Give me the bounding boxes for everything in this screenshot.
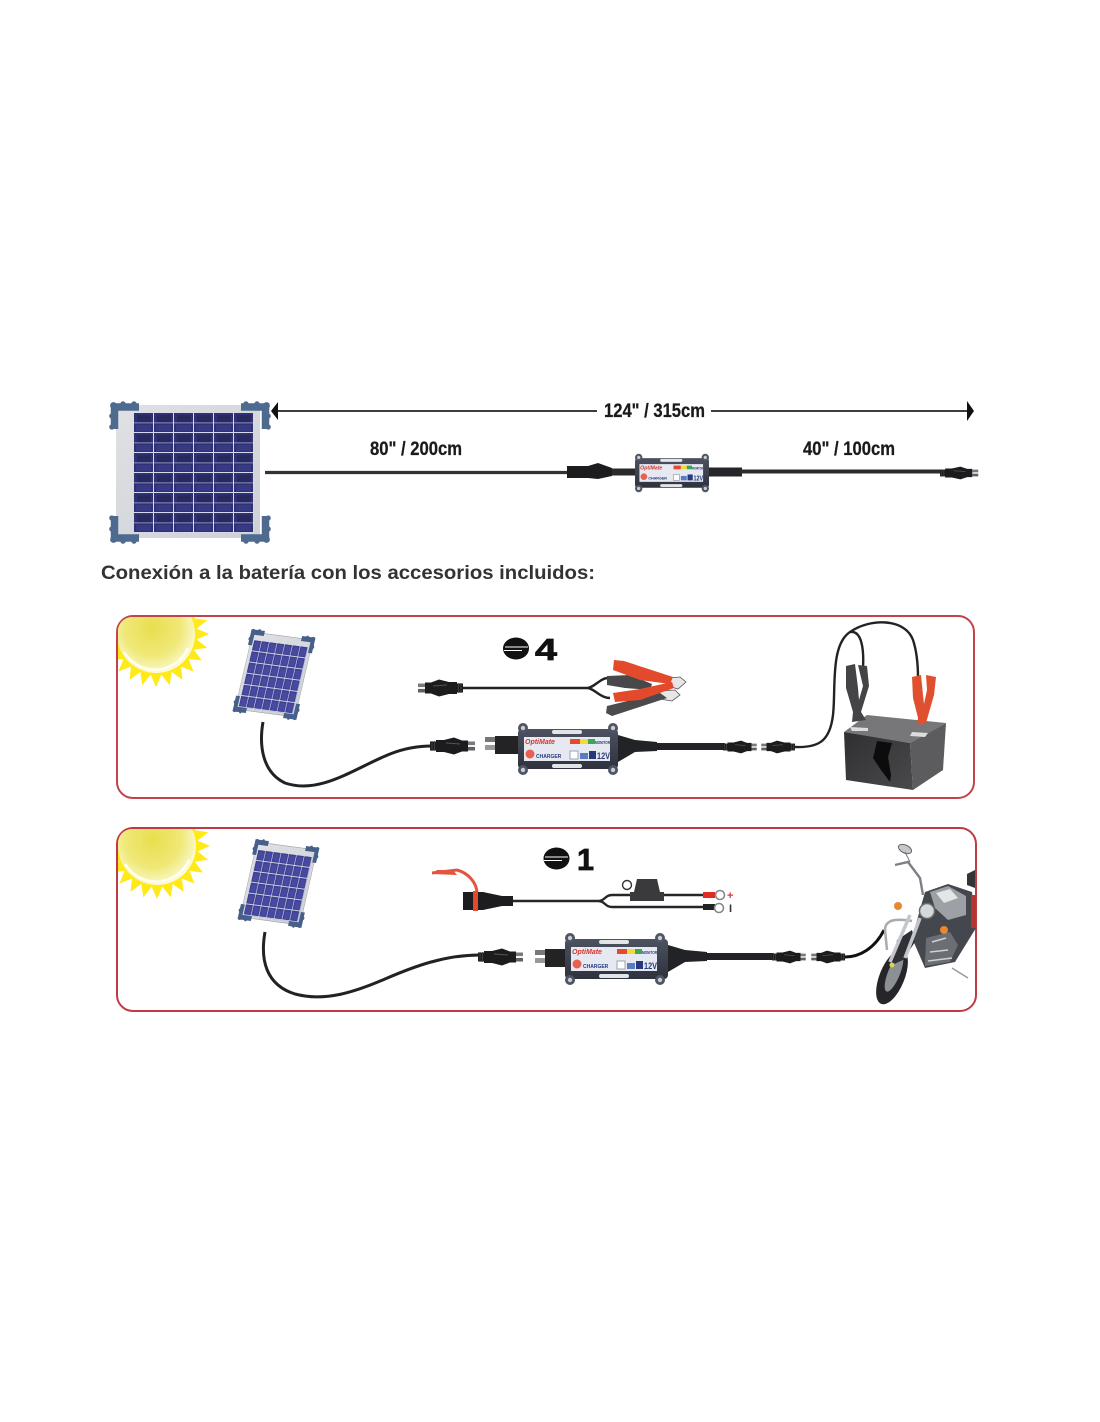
clamp black lower xyxy=(606,693,667,716)
charger unit: CHARGER xyxy=(536,754,562,760)
cable assembly: top overview xyxy=(265,463,978,479)
charger unit: CHARGER xyxy=(583,964,609,970)
connector: panel side xyxy=(430,738,475,754)
solar panel xyxy=(231,628,317,721)
front tire xyxy=(876,954,908,1004)
connector pair: output xyxy=(723,741,795,753)
minus label: I xyxy=(729,903,732,915)
red terminal xyxy=(703,892,715,898)
charger unit: MONITOR xyxy=(595,740,611,745)
panel frame xyxy=(117,616,974,798)
battery xyxy=(844,715,946,790)
red tank edge xyxy=(971,895,976,928)
chrome tank xyxy=(930,886,966,920)
charger: top overview: 12V xyxy=(693,475,703,482)
connector xyxy=(418,680,463,696)
motorcycle xyxy=(870,842,976,1009)
fender xyxy=(892,930,915,965)
charger unit xyxy=(565,933,668,985)
kickstand xyxy=(952,968,968,978)
black battery clamp xyxy=(846,664,869,722)
label: second cable length: 40" / 100cm xyxy=(803,439,895,460)
quantity symbol: 4: 4 xyxy=(535,632,558,667)
cable: panel to connector xyxy=(262,722,432,786)
cable: panel to connector xyxy=(263,932,480,997)
quantity symbol: 4 xyxy=(503,632,558,667)
icon: sun xyxy=(118,617,209,687)
charger plug connector xyxy=(485,736,518,754)
fork lamp marker xyxy=(890,962,894,968)
clamp black upper xyxy=(607,675,652,690)
plus label: + xyxy=(727,890,733,902)
handlebar xyxy=(895,862,923,895)
charger: top overview: MONITOR xyxy=(692,466,704,470)
clamp red upper xyxy=(613,660,673,684)
label: first cable length: 80" / 200cm xyxy=(370,439,462,460)
charger: top overview: CHARGER xyxy=(648,477,667,481)
charger unit: OptiMate xyxy=(572,949,602,956)
charger plug connector xyxy=(535,949,565,967)
black terminal xyxy=(703,904,715,910)
icon: sun xyxy=(118,829,210,899)
crash bar xyxy=(885,920,912,950)
heading: Conexión a la batería con los accesorios incluidos: xyxy=(101,562,595,584)
label: total length: 124" / 315cm xyxy=(604,401,705,422)
panel frame xyxy=(117,828,976,1011)
solar panel: top overview xyxy=(109,401,271,544)
red band xyxy=(473,891,478,911)
panel: motorcycle connection xyxy=(116,827,977,1012)
red battery clamp xyxy=(912,675,936,725)
charger unit: OptiMate xyxy=(525,739,555,746)
charger: top overview: OptiMate xyxy=(640,465,662,471)
accessory: battery clamp lead xyxy=(418,660,686,716)
wires xyxy=(513,895,705,907)
charger unit: 12V xyxy=(644,961,658,972)
dimension arrow: total length xyxy=(271,401,974,421)
clamp silver tips xyxy=(660,677,686,701)
clamp red lower xyxy=(613,682,674,702)
quantity symbol: 1: 1 xyxy=(577,842,594,877)
engine chrome xyxy=(925,932,958,966)
strain relief and output cable xyxy=(668,945,774,972)
panel: battery clamps connection xyxy=(116,615,975,799)
engine and body xyxy=(912,884,976,968)
fork xyxy=(890,915,920,962)
accessory: fused ring terminal lead xyxy=(432,870,733,915)
battery leads xyxy=(795,622,918,747)
mirror xyxy=(898,844,912,854)
charger unit: 12V xyxy=(597,751,611,762)
turn signal right xyxy=(940,926,948,934)
cable to motorcycle xyxy=(845,930,884,957)
strain relief and output cable xyxy=(618,735,725,762)
plug xyxy=(463,892,513,910)
connector: panel side xyxy=(478,948,523,966)
charger unit: MONITOR xyxy=(642,950,658,955)
solar panel xyxy=(236,838,321,929)
rubber cap xyxy=(432,870,477,892)
headlight xyxy=(920,904,934,918)
charger unit xyxy=(518,723,618,775)
turn signal left xyxy=(894,902,902,910)
seat xyxy=(967,870,975,888)
connector pair: output xyxy=(772,951,845,963)
fuse holder xyxy=(630,879,664,901)
quantity symbol: 1 xyxy=(544,842,594,877)
charger: top overview xyxy=(635,454,709,492)
